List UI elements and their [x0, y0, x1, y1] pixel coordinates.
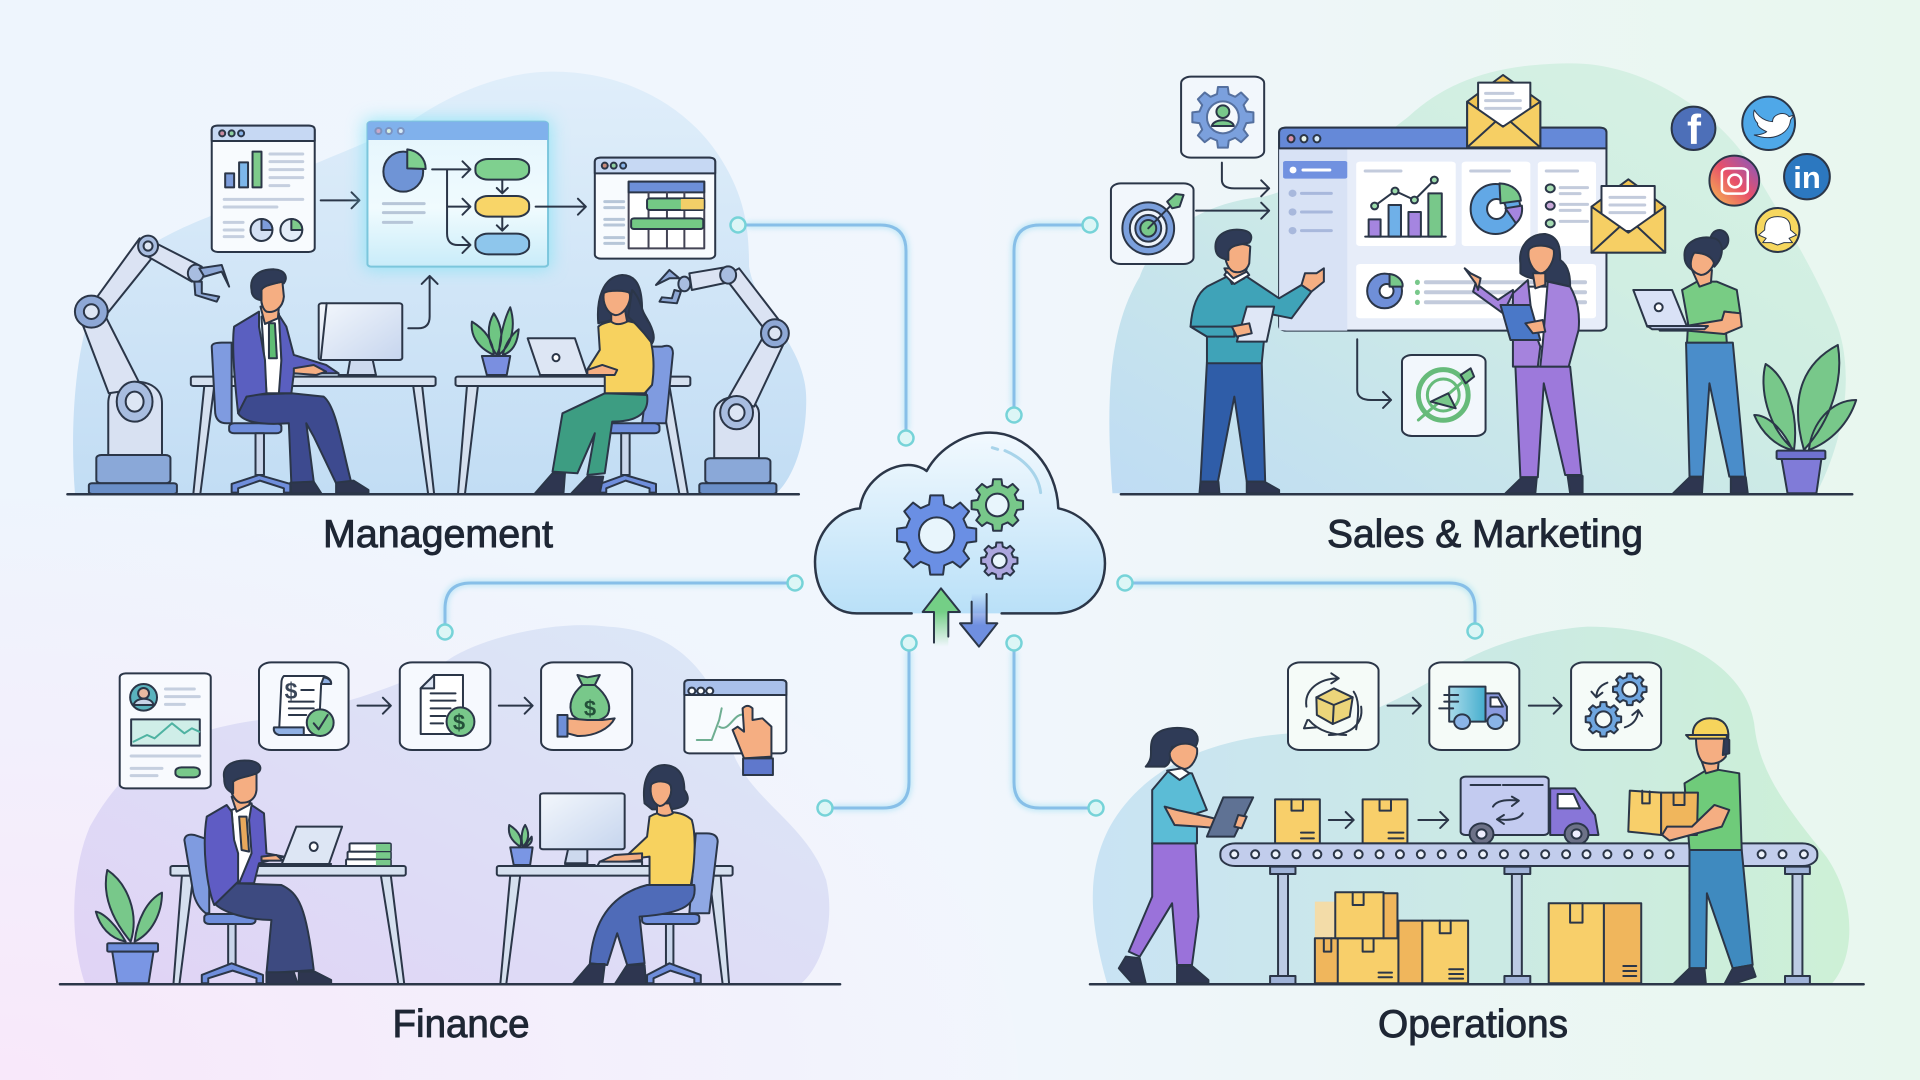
card: glowing workflow window [364, 119, 551, 269]
card: box cycle icon [1288, 662, 1379, 750]
arrows on conveyor [1329, 812, 1448, 828]
desk right [456, 377, 690, 494]
cloud highlight [992, 448, 1041, 493]
arrow [1529, 698, 1562, 714]
card: fast truck icon [1429, 662, 1519, 750]
blob: sales background [1109, 63, 1846, 493]
icon text: social and dollar glyphs: $ [453, 710, 465, 735]
woman with tablet [1119, 728, 1253, 983]
envelope top [1467, 75, 1540, 147]
plant [96, 870, 162, 983]
worker with box [1628, 718, 1756, 984]
arrow down [960, 593, 997, 647]
dashboard window [1279, 128, 1606, 331]
ground line [1121, 493, 1852, 496]
ground line [1090, 983, 1864, 986]
card: report window [212, 126, 315, 252]
card: gantt window [595, 158, 715, 259]
desk left [191, 377, 436, 494]
cloud outline [815, 433, 1105, 613]
icon text: social and dollar glyphs: $ [285, 678, 298, 704]
large box [1549, 903, 1641, 983]
blob: operations background [1093, 627, 1849, 984]
boxes on conveyor [1275, 799, 1407, 843]
desk right [497, 866, 733, 984]
panel: operations [1090, 627, 1864, 984]
arrow [499, 698, 533, 714]
icon text: social and dollar glyphs [285, 106, 1821, 735]
card: target icon [1111, 183, 1194, 264]
central cloud [815, 433, 1105, 647]
heading: Finance: Finance [392, 1003, 530, 1046]
heading: Management: Management [323, 513, 553, 556]
ground line [67, 493, 799, 496]
arrow up [923, 588, 960, 647]
woman with clipboard [1465, 234, 1583, 493]
envelope right [1592, 179, 1665, 253]
arrow to result card [1357, 339, 1391, 408]
arrows into dashboard [1196, 163, 1269, 219]
man presenting [1191, 230, 1324, 493]
connectors to cloud [438, 218, 1482, 816]
ground line [60, 983, 840, 986]
arrow [321, 192, 359, 208]
arrow up to window [408, 276, 438, 328]
icon text: social and dollar glyphs: f [1687, 106, 1702, 153]
arrow [358, 698, 391, 714]
plant [1754, 345, 1856, 493]
social icons [1672, 97, 1830, 252]
panel: sales and marketing [1109, 63, 1856, 494]
icon text: social and dollar glyphs: $ [584, 696, 596, 721]
blob: management background [73, 72, 806, 493]
robot arm left [75, 236, 229, 494]
gear green [972, 479, 1023, 531]
panel: finance [60, 625, 840, 984]
gear blue [897, 495, 976, 575]
arrow [536, 199, 586, 215]
woman at desk [535, 275, 673, 493]
browser with pointing hand [684, 680, 786, 775]
conveyor legs [1270, 867, 1810, 984]
robot arm right [656, 266, 789, 494]
card: profile report [120, 673, 211, 788]
icon text: social and dollar glyphs: in [1793, 160, 1821, 195]
laptop [528, 338, 607, 375]
panel: management [67, 72, 806, 494]
delivery truck [1461, 777, 1598, 845]
arrow [1388, 698, 1421, 714]
monitor [319, 303, 402, 375]
stacked boxes [1315, 892, 1468, 983]
books [346, 843, 391, 866]
man at laptop [184, 760, 331, 984]
card: money bag in hand [541, 662, 632, 750]
donut chart [1471, 183, 1522, 234]
bar and line chart [1365, 177, 1446, 237]
card: gears process icon [1571, 662, 1661, 750]
plant [472, 307, 519, 375]
lower panel content [1367, 274, 1585, 308]
woman at monitor [572, 765, 718, 984]
man at desk [212, 269, 368, 493]
conveyor belt [1220, 843, 1817, 866]
laptop [259, 827, 342, 865]
heading: Operations: Operations [1378, 1003, 1568, 1046]
blob: finance background [74, 625, 829, 983]
gear purple [981, 543, 1017, 579]
card: gear with person icon [1181, 77, 1264, 158]
heading: Sales & Marketing: Sales & Marketing [1327, 513, 1643, 556]
monitor [540, 793, 625, 865]
list items [1546, 184, 1588, 227]
woman with laptop [1633, 230, 1748, 493]
desk left [170, 866, 406, 984]
small plant [509, 825, 533, 865]
card: document with dollar [400, 662, 490, 750]
card: hit target icon [1402, 355, 1486, 436]
cloud body [815, 433, 1105, 613]
card: invoice approved [259, 662, 349, 750]
